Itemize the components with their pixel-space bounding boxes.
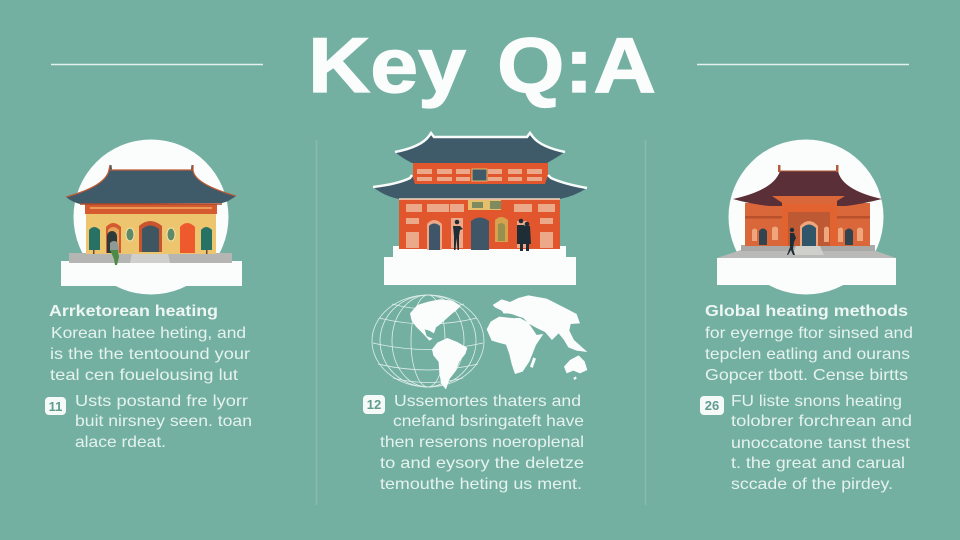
text block: teal cen fouelousing lut	[50, 367, 239, 384]
text block: t. the great and carual	[731, 455, 905, 472]
heading: Arrketorean heating	[49, 303, 218, 320]
text block: cnefand bsringateft have	[393, 413, 584, 430]
text block: FU liste snons heating	[731, 393, 902, 410]
person	[787, 228, 796, 255]
text block: is the the tentoound your	[50, 346, 251, 363]
badge	[45, 397, 66, 415]
panel: middle column	[363, 133, 587, 493]
icon: central two-storey temple	[373, 133, 587, 285]
text block	[731, 393, 912, 493]
text block	[75, 393, 252, 451]
text block: tolobrer forchrean and	[731, 413, 912, 430]
text block: for eyernge ftor sinsed and	[705, 325, 913, 342]
people	[453, 219, 531, 251]
badge: 12	[367, 397, 381, 412]
map: Americas	[410, 299, 467, 389]
text block: unoccatone tanst thest	[731, 435, 911, 452]
text block: Ussemortes thaters and	[394, 393, 581, 410]
text block: to and eysory the deletze	[380, 455, 584, 472]
text block	[705, 325, 913, 384]
badge: 11	[49, 399, 62, 414]
text block: temouthe heting us ment.	[380, 476, 582, 493]
title: Q:A	[497, 21, 656, 109]
person	[107, 231, 119, 265]
text block: alace rdeat.	[75, 434, 166, 451]
text block: Korean hatee heting, and	[51, 325, 246, 342]
icon: left temple	[61, 140, 242, 294]
icon: grid globe	[372, 295, 484, 387]
text block: buit nirsney seen. toan	[75, 413, 252, 430]
title: Key	[308, 21, 466, 109]
title	[308, 21, 656, 109]
text block: Usts postand fre lyorr	[75, 393, 249, 410]
badge	[363, 395, 385, 414]
panel: left column	[45, 140, 252, 451]
badge: 26	[705, 398, 719, 413]
badge	[700, 396, 724, 415]
text block	[380, 393, 584, 493]
icon: right temple	[717, 140, 896, 294]
text block	[50, 325, 251, 384]
map: Africa, Eurasia and Australia	[487, 295, 587, 380]
chart: two globes	[372, 295, 587, 389]
text block: tepclen eatling and ourans	[705, 346, 910, 363]
heading: Global heating methods	[705, 303, 908, 320]
text block: then reserons noeroplenal	[380, 434, 584, 451]
panel: right column	[700, 140, 913, 493]
text block: sccade of the pirdey.	[731, 476, 893, 493]
text block: Gopcer tbott. Cense birtts	[705, 367, 908, 384]
